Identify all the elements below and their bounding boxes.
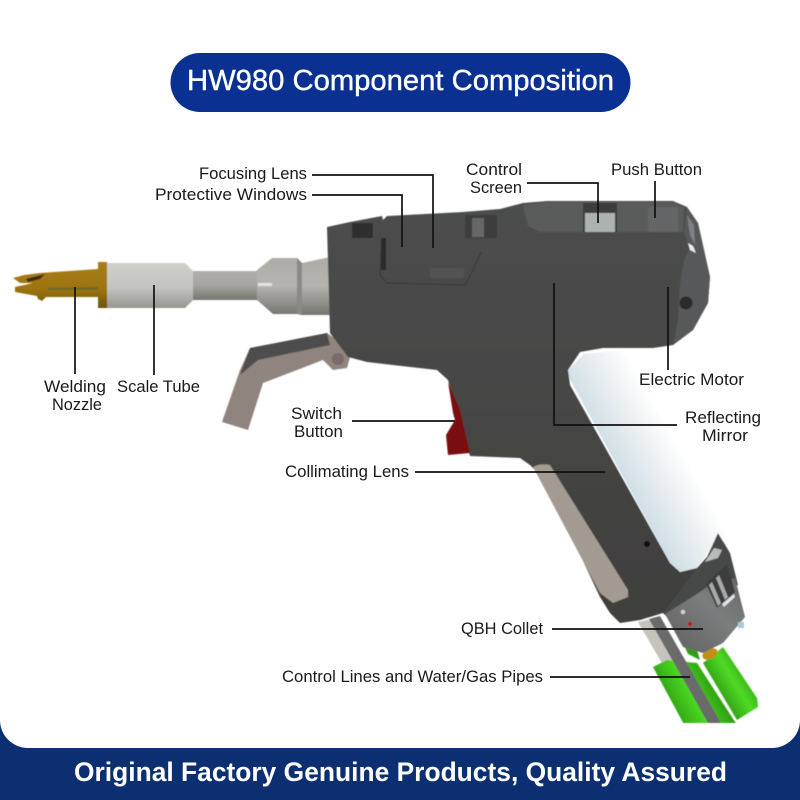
top control panel [523, 202, 684, 232]
QBH collet [665, 548, 745, 653]
side window slot [465, 215, 497, 238]
label: control screen: Control [466, 161, 522, 179]
rear end cap [673, 207, 710, 345]
lens door outline [380, 238, 481, 285]
title pill [170, 53, 630, 112]
footer banner background [0, 700, 800, 800]
label: protective windows: Protective Windows [155, 186, 307, 204]
label: reflecting mirror: Reflecting [685, 409, 761, 427]
front window slot [352, 223, 373, 238]
connecting rod [193, 271, 259, 300]
footer text: Original Factory Genuine Products, Quality Assured [74, 757, 727, 787]
collar rear dark section [663, 533, 738, 618]
upper green link [684, 647, 700, 660]
label: reflecting mirror [685, 409, 761, 445]
scale tube [107, 263, 193, 308]
welding gun illustration [13, 201, 758, 730]
label: reflecting mirror: Mirror [702, 427, 749, 445]
label: control screen [466, 161, 522, 197]
right green fitting [703, 647, 758, 720]
label: collimating lens: Collimating Lens [285, 463, 409, 481]
handle white tube [566, 350, 745, 572]
gold coupling [702, 648, 718, 660]
leader lines [75, 175, 703, 677]
label: electric motor: Electric Motor [639, 371, 745, 389]
trigger lever [222, 333, 350, 430]
protective window slit [381, 238, 386, 270]
left green fitting [653, 660, 737, 730]
red trigger switch [446, 382, 470, 455]
silver strip [638, 619, 678, 665]
label: switch button: Switch [291, 405, 342, 423]
label: push button: Push Button [611, 161, 702, 179]
braided gray cable [649, 616, 725, 730]
green pipe fittings [649, 616, 758, 730]
door latch [430, 268, 464, 278]
hex nut connector [257, 257, 330, 315]
gun body [327, 201, 715, 623]
control screen [583, 203, 617, 232]
label: welding nozzle: Nozzle [52, 396, 102, 414]
label: control lines and pipes: Control Lines and Water/Gas Pipes [282, 668, 543, 686]
label: focusing lens: Focusing Lens [199, 165, 307, 183]
label: QBH collet: QBH Collet [461, 620, 543, 638]
push button [648, 207, 678, 232]
label: switch button: Button [294, 423, 343, 441]
label: control screen: Screen [470, 179, 522, 197]
grip hole [644, 541, 650, 547]
label: welding nozzle: Welding [44, 378, 106, 396]
label: welding nozzle [44, 378, 106, 414]
label: scale tube: Scale Tube [117, 378, 200, 396]
welding nozzle [13, 262, 107, 308]
label: switch button [291, 405, 343, 441]
grip side strip [533, 464, 628, 603]
title pill: HW980 Component Composition [187, 65, 614, 97]
